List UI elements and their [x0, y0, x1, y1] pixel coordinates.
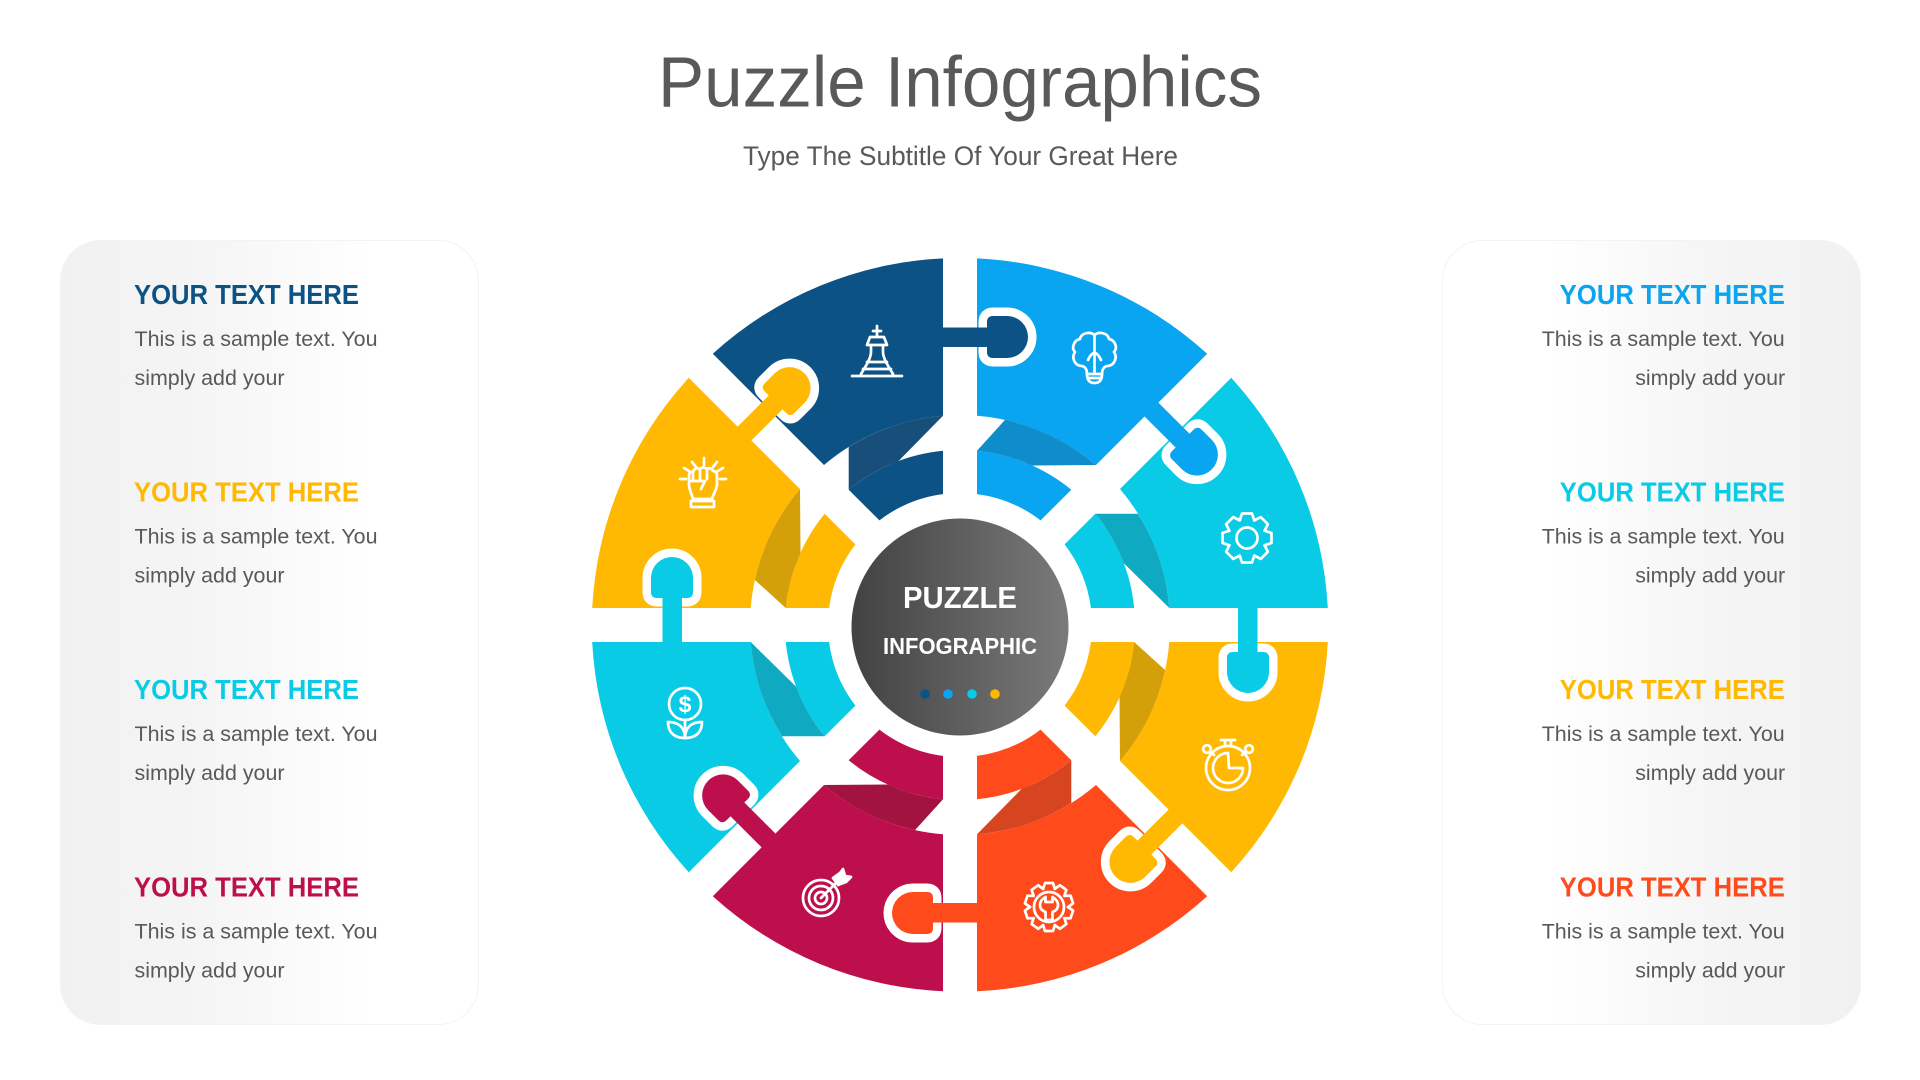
icon: dollar flower: $ [679, 692, 692, 718]
text block: right item 2: This is a sample text. You [1542, 524, 1785, 548]
text block: right item 3: This is a sample text. You [1542, 722, 1785, 746]
text block: right item 2 [1542, 477, 1785, 588]
puzzle tab: sky blue into cyan [1136, 394, 1227, 484]
puzzle tab: orange into crimson [892, 892, 978, 934]
icon: target with arrow [803, 869, 851, 916]
text block: left item 1: simply add your [134, 366, 284, 390]
text block: left item 2: This is a sample text. You [134, 524, 378, 548]
icon: gear with wrench [1024, 883, 1074, 931]
text block: right item 3: YOUR TEXT HERE [1560, 674, 1785, 705]
puzzle tab: dark blue into sky blue [942, 316, 1028, 358]
text block: left item 2: simply add your [134, 564, 284, 588]
icon: stopwatch [1203, 740, 1253, 790]
icon: raised fist [680, 458, 726, 507]
piece: sky blue [977, 258, 1207, 520]
text block: right item 4 [1542, 872, 1785, 982]
piece: orange [977, 730, 1207, 991]
text block: left item 3: simply add your [134, 761, 284, 785]
piece: yellow left [592, 378, 855, 608]
piece: cyan left [592, 642, 855, 872]
puzzle tab: yellow into orange [1101, 801, 1191, 892]
text block: left item 3: YOUR TEXT HERE [134, 674, 359, 705]
icon: brain bulb [1073, 333, 1116, 383]
text block: left item 4: This is a sample text. You [134, 920, 378, 944]
center hub: PUZZLE [903, 580, 1017, 615]
puzzle wheel [592, 258, 1328, 991]
title: Puzzle Infographics [658, 42, 1262, 122]
puzzle tab: cyan into yellow [1227, 607, 1269, 693]
text block: right item 4: simply add your [1635, 958, 1785, 982]
center hub: INFOGRAPHIC [883, 633, 1037, 659]
text block: left item 4: simply add your [134, 958, 284, 982]
piece: cyan right [1065, 378, 1328, 608]
text block: left item 3: This is a sample text. You [134, 722, 378, 746]
text block: left item 1: YOUR TEXT HERE [134, 279, 359, 310]
text block: left item 2 [134, 477, 378, 588]
text block: left item 4 [134, 872, 378, 982]
text block: right item 1: simply add your [1635, 366, 1785, 390]
text block: right item 2: simply add your [1635, 564, 1785, 588]
center hub [852, 518, 1068, 736]
text block: left item 2: YOUR TEXT HERE [134, 477, 359, 508]
text block: right item 1: This is a sample text. You [1542, 327, 1785, 351]
icon: chess king [852, 326, 902, 376]
text block: left item 1 [134, 279, 378, 390]
piece: crimson [713, 730, 943, 991]
icon: gear [1222, 514, 1272, 562]
text block: left item 3 [134, 674, 378, 785]
text block: right item 4: This is a sample text. You [1542, 920, 1785, 944]
piece: dark blue [713, 258, 943, 520]
text block: left item 4: YOUR TEXT HERE [134, 872, 359, 903]
text block: right item 3 [1542, 674, 1785, 785]
puzzle tab: cyan into yellow left [651, 557, 693, 643]
text block: right item 2: YOUR TEXT HERE [1560, 477, 1785, 508]
subtitle: Type The Subtitle Of Your Great Here [743, 141, 1178, 171]
icon: dollar flower [668, 688, 702, 738]
text block: right item 1: YOUR TEXT HERE [1560, 279, 1785, 310]
text block: right item 4: YOUR TEXT HERE [1560, 872, 1785, 903]
panel: right text list [1442, 240, 1860, 1024]
puzzle tab: yellow into dark blue [729, 358, 819, 449]
text block: right item 3: simply add your [1635, 761, 1785, 785]
text block: left item 1: This is a sample text. You [134, 327, 378, 351]
puzzle tab: crimson into cyan [693, 766, 784, 856]
piece: yellow right [1065, 642, 1328, 872]
text block: right item 1 [1542, 279, 1785, 390]
panel: left text list [60, 240, 478, 1024]
